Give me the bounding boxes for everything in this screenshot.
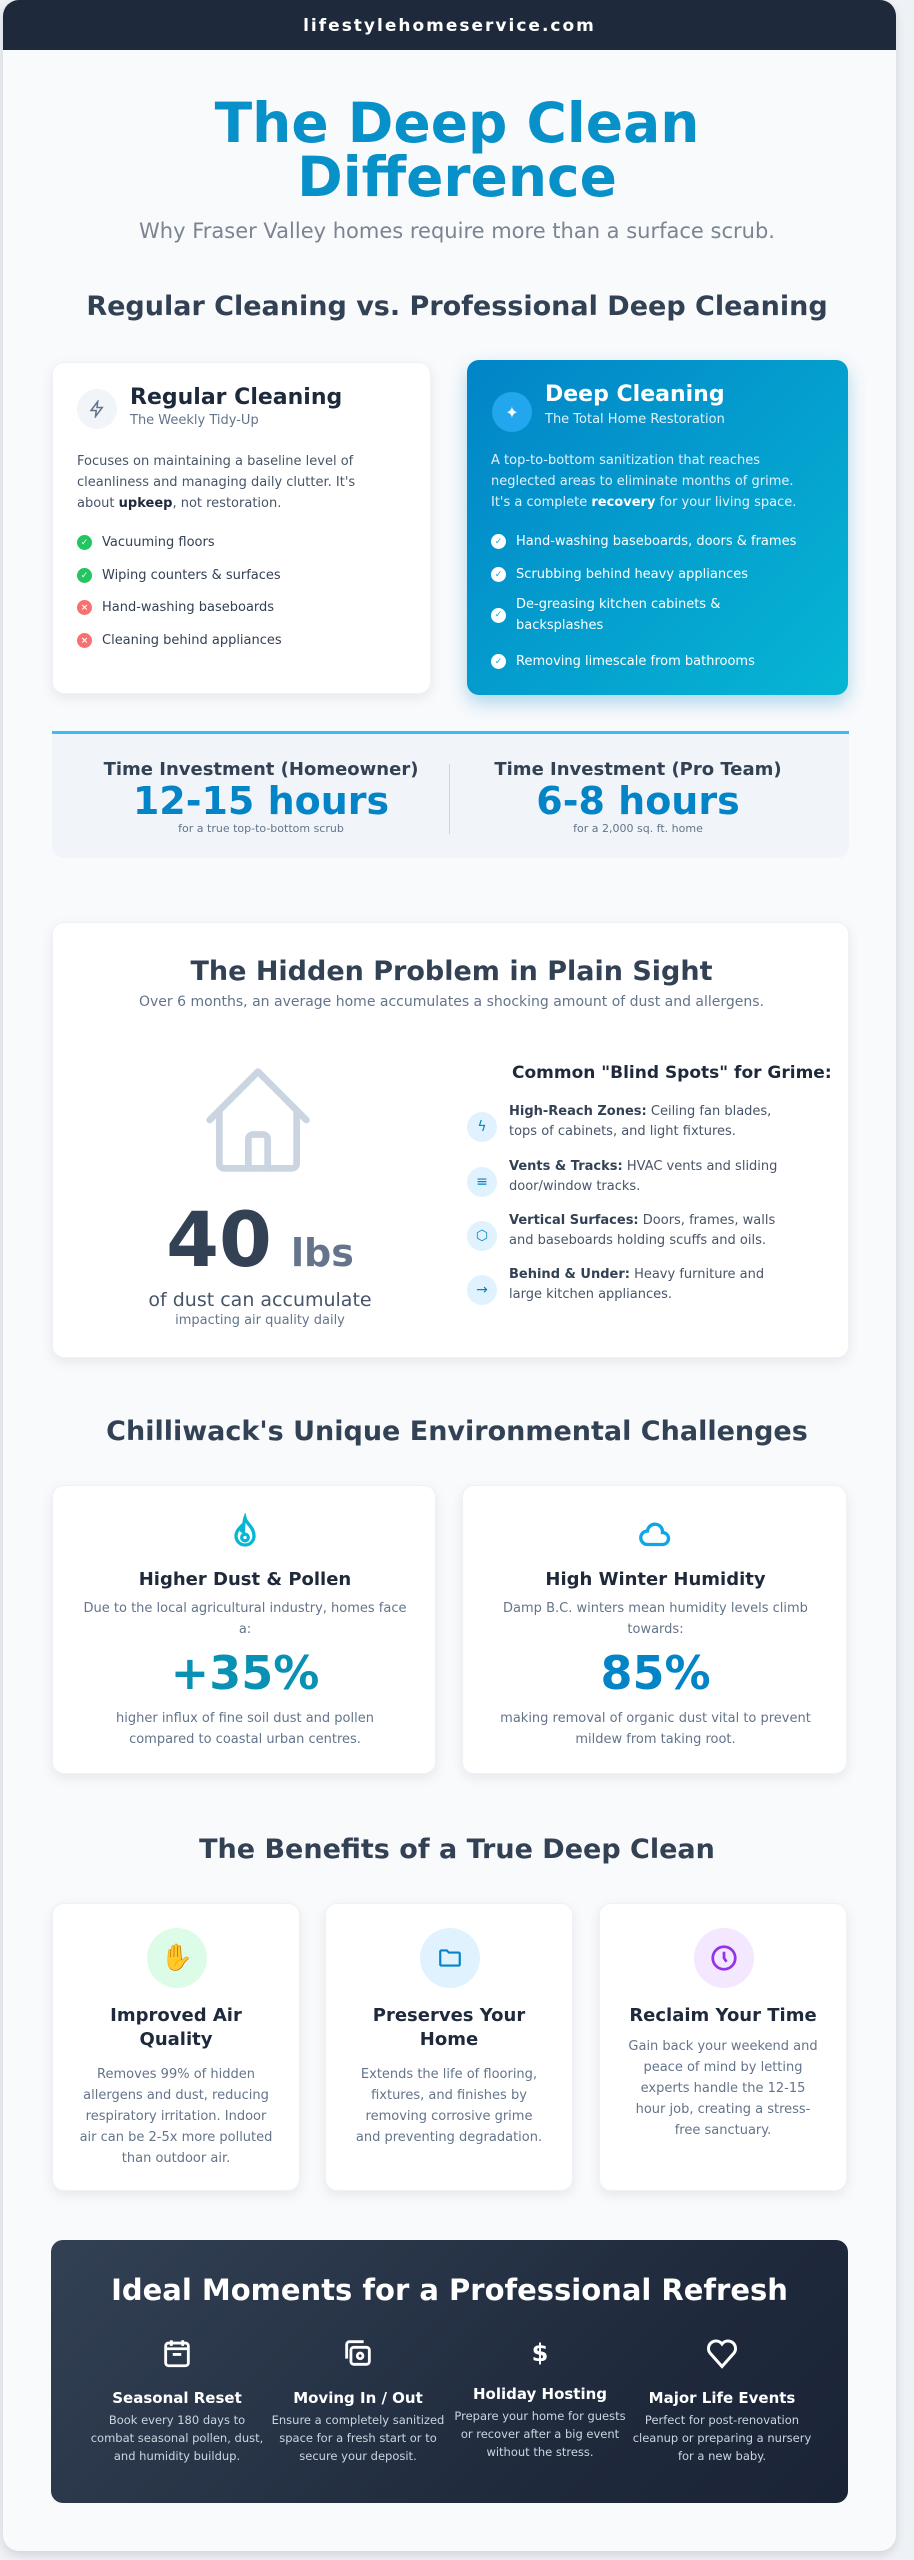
heading: Ideal Moments for a Professional Refresh [111,2273,788,2307]
blind spot: vents: ≡ [476,1174,488,1190]
benefit: air quality: than outdoor air. [122,2151,230,2166]
deep title: Deep Cleaning [545,382,725,407]
panel: time investment [52,731,849,858]
blind spot: vertical: ⬡ [476,1228,488,1244]
deep checklist: Removing limescale from bathrooms [516,654,755,669]
moment: seasonal [91,2340,263,2463]
benefit: air quality: respiratory irritation. Indoor [86,2109,266,2124]
panel: dust & pollen: Higher Dust & Pollen [139,1569,351,1590]
header bar: lifestylehomeservice.com [303,16,596,36]
pro team time: Time Investment (Pro Team) [494,759,782,780]
panel: humidity: High Winter Humidity [545,1569,766,1590]
benefit: time: experts handle the 12-15 [641,2081,805,2096]
benefit: preserves: Preserves Your [373,2005,525,2026]
heading: benefits: The Benefits of a True Deep Clean [199,1834,715,1865]
moment: holiday: Holiday Hosting [473,2385,607,2403]
moment: moving [272,2340,444,2463]
blind spot: behind: Behind & Under: Heavy furniture and large kitchen appliances. [509,1267,764,1302]
benefit: air quality: Quality [140,2029,212,2050]
regular subtitle: The Weekly Tidy-Up [130,413,259,428]
moment: seasonal: Book every 180 days to combat seasonal pollen, dust, and humidity buildup. [91,2413,263,2463]
panel: regular cleaning [52,362,431,694]
benefit: preserves: fixtures, and finishes by [371,2088,527,2103]
regular checklist: Hand-washing baseboards [102,600,274,615]
benefit: preserves [325,1903,573,2191]
regular checklist: Cleaning behind appliances [102,633,282,648]
panel: humidity: making removal of organic dust vital to prevent mildew from taking root. [500,1711,811,1747]
pro team time [494,759,782,835]
icon: clock [694,1928,754,1988]
icon: bolt [77,389,117,429]
panel: dust & pollen [52,1485,436,1774]
deep checklist: ✓ [495,570,502,580]
benefit: air quality: Removes 99% of hidden [97,2067,255,2082]
title [214,91,699,209]
blind spot: vertical: Vertical Surfaces: Doors, frames, walls and baseboards holding scuffs and oils. [509,1213,775,1248]
blind spot: vents: Vents & Tracks: HVAC vents and sliding door/window tracks. [509,1159,777,1194]
regular checklist: × [81,602,88,612]
panel: dust & pollen: Due to the local agricultural industry, homes face a: [84,1601,406,1637]
homeowner time: for a true top-to-bottom scrub [178,822,344,835]
benefit: time: Gain back your weekend and [628,2039,818,2054]
moment: moving: Moving In / Out [293,2389,423,2407]
moment: life events: Perfect for post-renovation cleanup or preparing a nursery for a new baby. [633,2413,811,2463]
deep checklist: backsplashes [516,618,603,633]
moment: seasonal: Seasonal Reset [112,2389,242,2407]
moment: life events: Major Life Events [649,2389,795,2407]
heading: The Hidden Problem in Plain Sight [190,956,713,987]
icon: cloud [639,1522,670,1546]
heading: comparison: Regular Cleaning vs. Professional Deep Cleaning [86,291,828,322]
deep checklist: ✓ [495,656,502,666]
icon: sparkles: ✦ [505,402,519,422]
benefit: air quality: Improved Air [110,2005,242,2026]
benefit: time: peace of mind by letting [643,2060,803,2075]
deep subtitle: The Total Home Restoration [545,412,725,427]
pro team time: for a 2,000 sq. ft. home [573,822,703,835]
panel: hidden problem [52,922,849,1358]
regular checklist: Vacuuming floors [102,535,215,550]
benefit: air quality: air can be 2-5x more polluted [80,2130,272,2145]
deep checklist [491,534,796,669]
benefit: air quality [52,1903,300,2191]
homeowner time: 12-15 hours [133,779,389,823]
blind spot: behind: → [476,1282,488,1298]
benefit: preserves: Home [420,2029,478,2050]
benefit: time [599,1903,847,2191]
deep checklist: De-greasing kitchen cabinets & [516,597,720,612]
panel: dust & pollen: higher influx of fine soil dust and pollen compared to coastal urban centres. [116,1711,374,1747]
homeowner time [104,759,418,835]
title: Difference [297,145,617,209]
regular checklist: ✓ [81,538,88,548]
icon: flame [234,1513,256,1547]
benefit: preserves: and preventing degradation. [356,2130,542,2145]
deep checklist: ✓ [495,610,502,620]
moment: moving: Ensure a completely sanitized space for a fresh start or to secure your deposit. [272,2413,444,2463]
icon: hand: ✋ [161,1943,193,1973]
deep description: A top-to-bottom sanitization that reaches neglected areas to eliminate months of grime. It's a complete recovery for your living space. [491,453,796,510]
benefit: time: free sanctuary. [675,2123,771,2138]
subheading: Over 6 months, an average home accumulates a shocking amount of dust and allergens. [139,994,764,1010]
regular title: Regular Cleaning [130,385,342,410]
regular description: Focuses on maintaining a baseline level of cleanliness and managing daily clutter. It's about upkeep, not restoration. [77,454,355,511]
pro team time: 6-8 hours [536,779,740,823]
regular checklist [77,535,282,648]
blind spot: high reach: High-Reach Zones: Ceiling fan blades, tops of cabinets, and light fixtures. [509,1104,771,1139]
title: The Deep Clean [215,91,699,155]
heading: chilliwack: Chilliwack's Unique Environmental Challenges [106,1416,808,1447]
deep checklist: Hand-washing baseboards, doors & frames [516,534,796,549]
icon: hand [147,1928,207,1988]
moment: holiday: $ [532,2339,548,2367]
regular checklist: Wiping counters & surfaces [102,568,281,583]
homeowner time: Time Investment (Homeowner) [104,759,418,780]
deep checklist: ✓ [495,536,502,546]
subtitle: Why Fraser Valley homes require more than a surface scrub. [139,219,775,243]
panel: dust & pollen: +35% [171,1646,319,1700]
icon: folder [420,1928,480,1988]
panel: deep cleaning [467,360,848,695]
stat: 40 lbs: 40 lbs [166,1195,354,1284]
panel: humidity: Damp B.C. winters mean humidity levels climb towards: [503,1601,808,1637]
moment: life events [633,2340,811,2463]
panel: humidity: 85% [600,1646,711,1700]
regular checklist: ✓ [81,570,88,580]
benefit: air quality: allergens and dust, reducing [83,2088,269,2103]
blind spots heading: Common "Blind Spots" for Grime: [512,1063,832,1083]
benefit: preserves: Extends the life of flooring, [361,2067,537,2082]
stat: 40 lbs: impacting air quality daily [175,1313,345,1328]
blind spot: high reach: ϟ [477,1119,487,1135]
panel: ideal moments [51,2240,848,2503]
stat: 40 lbs [148,1195,372,1328]
moment: holiday [454,2339,626,2459]
deep checklist: Scrubbing behind heavy appliances [516,567,748,582]
benefit: time: hour job, creating a stress- [636,2102,810,2117]
regular checklist: × [81,636,88,646]
icon: house [206,1068,310,1172]
benefit: time: Reclaim Your Time [629,2005,817,2026]
moment: holiday: Prepare your home for guests or recover after a big event without the stress. [454,2409,626,2459]
stat: 40 lbs: of dust can accumulate [148,1289,372,1311]
header bar [3,0,896,50]
benefit: preserves: removing corrosive grime [366,2109,532,2124]
panel: humidity [462,1485,847,1774]
icon: sparkles [492,392,532,432]
